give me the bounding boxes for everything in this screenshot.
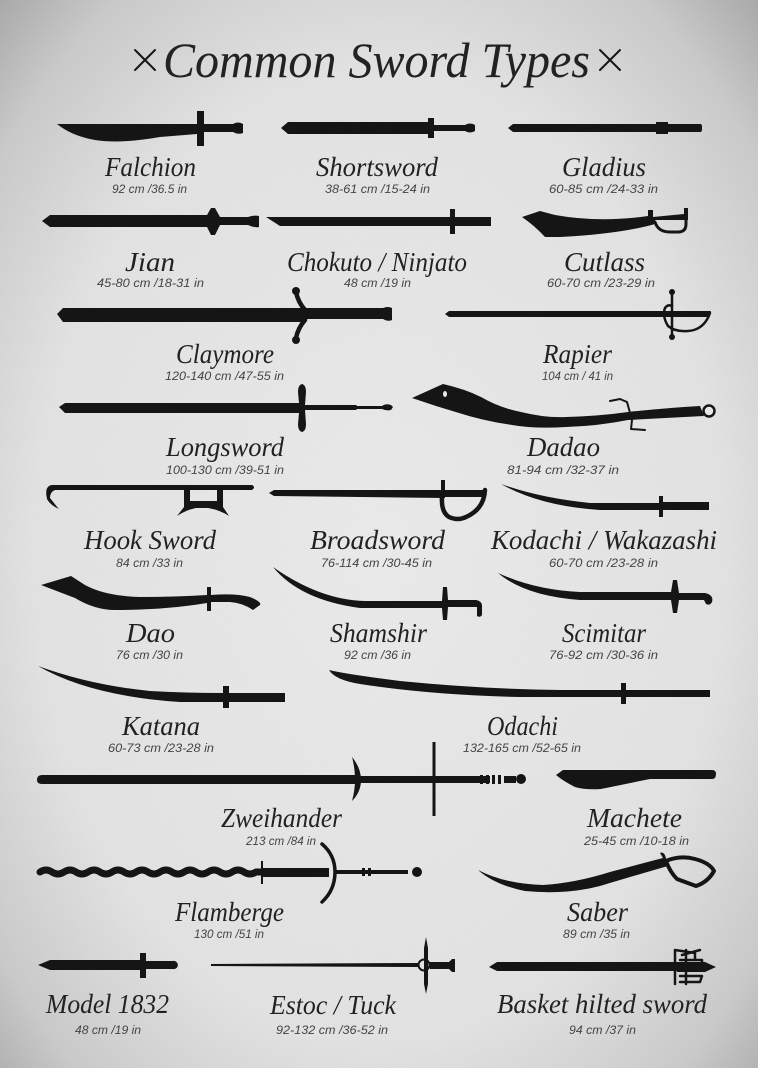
sword: Longsword: Longsword xyxy=(165,432,284,462)
sword: Hook Sword: 84 cm /33 in xyxy=(116,556,183,570)
sword: Hook Sword: Hook Sword xyxy=(83,525,216,555)
sword: Katana: Katana xyxy=(121,711,200,741)
sword: Claymore xyxy=(57,287,392,383)
sword: Rapier: 104 cm / 41 in xyxy=(542,369,613,383)
sword: Scimitar: 76-92 cm /30-36 in xyxy=(549,648,658,662)
sword: Zweihander xyxy=(37,742,526,848)
sword: Cutlass xyxy=(522,208,688,290)
sword: Odachi: Odachi xyxy=(487,711,558,741)
sword: Dadao xyxy=(412,384,714,477)
sword: Gladius xyxy=(508,122,702,196)
sword: Gladius: Gladius xyxy=(562,152,646,182)
sword: Dao: 76 cm /30 in xyxy=(116,648,183,662)
sword: Dadao: Dadao xyxy=(526,432,600,462)
sword: Basket hilted sword: Basket hilted sword xyxy=(497,989,707,1019)
sword: Claymore: Claymore xyxy=(176,339,274,369)
title text: Common Sword Types xyxy=(163,32,590,88)
title xyxy=(135,32,620,88)
sword: Model 1832 xyxy=(38,953,178,1037)
sword: Machete xyxy=(556,770,716,848)
sword: Broadsword: Broadsword xyxy=(310,525,446,555)
icon: left cross mark xyxy=(135,50,155,70)
sword: Falchion: 92 cm /36.5 in xyxy=(112,182,187,196)
sword: Katana: 60-73 cm /23-28 in xyxy=(108,741,214,755)
sword: Shamshir xyxy=(273,567,482,662)
sword: Jian xyxy=(42,208,259,290)
sword: Chokuto / Ninjato: 48 cm /19 in xyxy=(344,276,411,290)
sword: Dao: Dao xyxy=(125,618,175,648)
sword: Kodachi / Wakazashi: Kodachi / Wakazashi xyxy=(490,525,717,555)
sword: Cutlass: Cutlass xyxy=(564,247,645,277)
sword: Saber xyxy=(478,853,714,941)
sword: Estoc / Tuck: 92-132 cm /36-52 in xyxy=(276,1023,388,1037)
sword: Basket hilted sword: 94 cm /37 in xyxy=(569,1023,636,1037)
sword: Claymore: 120-140 cm /47-55 in xyxy=(165,369,284,383)
sword: Longsword xyxy=(59,384,393,477)
sword: Rapier: Rapier xyxy=(542,339,612,369)
sword: Jian: 45-80 cm /18-31 in xyxy=(97,276,204,290)
sword: Odachi: 132-165 cm /52-65 in xyxy=(463,741,581,755)
sword: Falchion: Falchion xyxy=(104,152,196,182)
sword: Saber: Saber xyxy=(567,897,628,927)
sword: Model 1832: Model 1832 xyxy=(45,989,169,1019)
sword: Shortsword xyxy=(281,118,475,196)
sword: Odachi xyxy=(329,670,710,755)
sword: Estoc / Tuck xyxy=(211,937,455,1037)
sword: Cutlass: 60-70 cm /23-29 in xyxy=(547,276,655,290)
sword: Zweihander: Zweihander xyxy=(221,803,342,833)
sword: Shortsword: 38-61 cm /15-24 in xyxy=(325,182,430,196)
sword: Chokuto / Ninjato: Chokuto / Ninjato xyxy=(287,247,467,277)
sword: Machete: Machete xyxy=(586,803,682,833)
sword: Gladius: 60-85 cm /24-33 in xyxy=(549,182,658,196)
sword: Shamshir: 92 cm /36 in xyxy=(344,648,411,662)
sword: Kodachi / Wakazashi xyxy=(490,484,717,570)
sword: Flamberge xyxy=(40,844,422,941)
sword: Jian: Jian xyxy=(125,247,175,277)
sword: Scimitar xyxy=(498,573,712,662)
sword: Dadao: 81-94 cm /32-37 in xyxy=(507,463,619,477)
sword: Model 1832: 48 cm /19 in xyxy=(75,1023,141,1037)
icon: right cross mark xyxy=(600,50,620,70)
sword: Flamberge: 130 cm /51 in xyxy=(194,927,264,941)
sword: Scimitar: Scimitar xyxy=(562,618,646,648)
sword: Longsword: 100-130 cm /39-51 in xyxy=(166,463,284,477)
sword: Rapier xyxy=(445,289,711,383)
sword: Estoc / Tuck: Estoc / Tuck xyxy=(269,990,397,1020)
sword: Kodachi / Wakazashi: 60-70 cm /23-28 in xyxy=(549,556,658,570)
sword: Katana xyxy=(38,666,285,755)
sword: Basket hilted sword xyxy=(489,950,716,1037)
sword: Hook Sword xyxy=(46,485,254,570)
sword: Saber: 89 cm /35 in xyxy=(563,927,630,941)
sword: Broadsword: 76-114 cm /30-45 in xyxy=(321,556,432,570)
sword: Shamshir: Shamshir xyxy=(330,618,427,648)
sword: Dao xyxy=(41,576,260,662)
sword: Zweihander: 213 cm /84 in xyxy=(245,834,316,848)
sword: Flamberge: Flamberge xyxy=(174,897,284,927)
sword: Machete: 25-45 cm /10-18 in xyxy=(583,834,689,848)
sword: Falchion xyxy=(57,111,243,196)
sword: Broadsword xyxy=(269,480,486,570)
sword: Chokuto / Ninjato xyxy=(266,209,491,290)
sword: Shortsword: Shortsword xyxy=(316,152,438,182)
